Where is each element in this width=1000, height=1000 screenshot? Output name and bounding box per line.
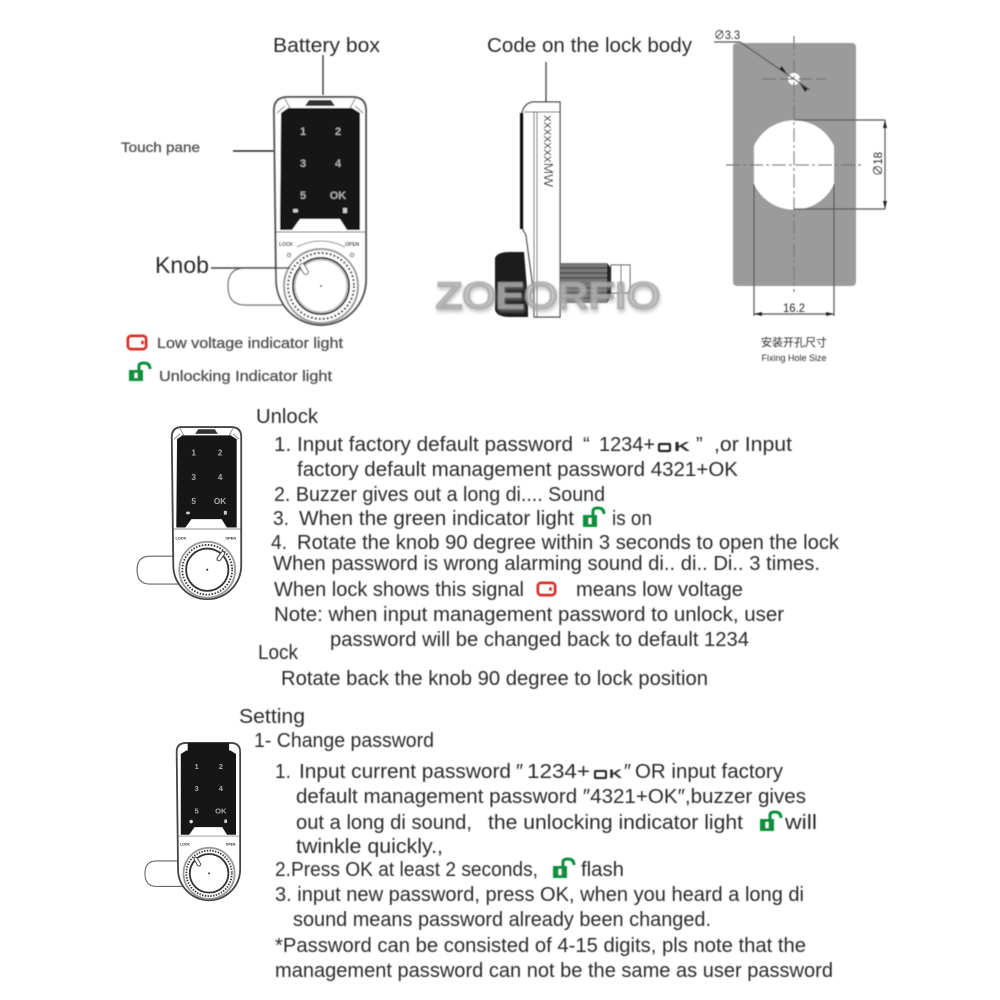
change password step 1: OR input factory: [635, 761, 783, 783]
panel: unlock illustration: [137, 427, 241, 599]
panel: unlock instructions: [256, 406, 840, 690]
panel: unlock illustration: 3: [191, 472, 196, 482]
change password step 1: [275, 761, 817, 858]
change password step 1: 1234+: [527, 761, 590, 783]
front lock illustration: LOCK: [279, 242, 294, 248]
change password step 1: default management password ″4321+OK″,buzzer gives: [296, 786, 806, 808]
change password step 2: 2.Press OK at least 2 seconds,: [275, 859, 538, 881]
steps 1 to 4: Rotate the knob 90 degree within 3 seconds to open the lock: [297, 532, 840, 554]
front lock illustration: 1: [300, 126, 306, 138]
steps 1 to 4: 1. Input factory default password: [274, 434, 573, 456]
steps 1 to 4: 2. Buzzer gives out a long di.... Sound: [274, 484, 605, 506]
notes: When lock shows this signal: [274, 579, 524, 601]
watermark: ZOEORFIO: [436, 275, 660, 316]
notes: password will be changed back to default 1234: [330, 629, 749, 651]
change password step 3: [275, 884, 804, 931]
panel: unlock illustration: OPEN: [225, 537, 236, 541]
center lines and dimensions: [714, 36, 885, 316]
label: battery box: [273, 35, 380, 95]
caption: [761, 335, 827, 363]
subheading: change password: 1- Change password: [254, 730, 434, 752]
caption: 安装开孔尺寸: [761, 335, 827, 349]
dimension labels: [714, 28, 885, 315]
steps 1 to 4: 3.: [273, 508, 289, 530]
gray mounting plate: [733, 43, 856, 286]
change password step 1: will: [784, 812, 817, 834]
steps 1 to 4: 4.: [271, 532, 287, 554]
steps 1 to 4: factory default management password 4321+OK: [297, 459, 739, 481]
legend: low voltage indicator: Low voltage indicator light: [157, 336, 343, 352]
steps 1 to 4: is on: [612, 508, 652, 530]
change password step 1: 1.: [275, 761, 291, 783]
steps 1 to 4: [271, 434, 840, 554]
side lock illustration: xxxxxxxMW: [541, 115, 556, 188]
password note: management password can not be the same as user password: [275, 960, 833, 982]
lock step: Rotate back the knob 90 degree to lock position: [281, 668, 708, 690]
legend: unlocking indicator: Unlocking Indicator light: [159, 369, 332, 385]
change password step 1: twinkle quickly.,: [296, 836, 443, 858]
panel: unlock illustration: 1: [191, 448, 196, 458]
change password step 1: ″: [516, 761, 523, 783]
large cut-out: [754, 120, 834, 210]
panel: unlock illustration: 4: [218, 472, 223, 482]
dimension labels: ∅18: [871, 152, 885, 176]
panel: setting illustration: 5: [195, 806, 199, 815]
panel: setting instructions: [239, 706, 833, 982]
label: knob: [155, 252, 290, 278]
steps 1 to 4: “: [583, 434, 590, 456]
panel: setting illustration: OK: [215, 806, 227, 815]
caption: Fixing Hole Size: [761, 353, 827, 363]
dimension labels: ∅3.3: [714, 28, 740, 42]
front lock illustration: 5: [300, 190, 306, 202]
panel: front view diagram: [121, 35, 380, 385]
panel: fixing hole size diagram: [714, 28, 887, 363]
change password step 1: ″: [624, 761, 631, 783]
heading: lock: Lock: [258, 642, 299, 664]
side lock illustration: [495, 102, 630, 317]
change password step 1: the unlocking indicator light: [488, 812, 743, 834]
password note: *Password can be consisted of 4-15 digits, pls note that the: [275, 935, 806, 957]
label: knob: Knob: [155, 252, 209, 278]
label: battery box: Battery box: [273, 35, 380, 57]
heading: unlock: Unlock: [256, 406, 319, 428]
panel: side view diagram: [436, 35, 692, 317]
notes: means low voltage: [576, 579, 743, 601]
label: code on the lock body: Code on the lock body: [487, 35, 692, 57]
small screw hole: [788, 73, 800, 85]
panel: setting illustration: LOCK: [180, 843, 190, 847]
panel: setting illustration: 3: [195, 784, 199, 793]
panel: unlock illustration: 2: [218, 448, 223, 458]
change password step 2: flash: [581, 859, 624, 881]
steps 1 to 4: ”: [696, 434, 703, 456]
change password step 1: Input current password: [299, 761, 511, 783]
heading: setting: Setting: [239, 706, 305, 728]
front lock illustration: 4: [335, 158, 342, 170]
dimension labels: 16.2: [783, 301, 805, 315]
panel: setting illustration: OPEN: [226, 843, 236, 847]
legend: unlocking indicator: [129, 363, 332, 385]
change password step 1: K: [609, 767, 622, 781]
panel: setting illustration: 2: [219, 762, 223, 771]
panel: unlock illustration: 5: [191, 496, 196, 506]
front lock illustration: 2: [335, 126, 341, 138]
front lock illustration: OK: [330, 190, 346, 202]
notes: When password is wrong alarming sound di.. di.. Di.. 3 times.: [273, 553, 820, 575]
password note: [275, 935, 833, 982]
panel: setting illustration: [145, 743, 240, 900]
change password step 3: sound means password already been changed.: [293, 909, 711, 931]
steps 1 to 4: 1234+: [599, 434, 655, 456]
panel: unlock illustration: OK: [214, 496, 226, 506]
change password step 1: out a long di sound,: [296, 812, 472, 834]
steps 1 to 4: ,or Input: [714, 434, 792, 456]
panel: setting illustration: 1: [195, 762, 199, 771]
steps 1 to 4: K: [674, 439, 691, 454]
change password step 3: 3. input new password, press OK, when you heard a long di: [275, 884, 804, 906]
panel: unlock illustration: LOCK: [176, 537, 186, 541]
front lock illustration: OPEN: [345, 242, 360, 248]
steps 1 to 4: When the green indicator light: [299, 508, 574, 530]
front lock illustration: 3: [300, 158, 306, 170]
notes: Note: when input management password to unlock, user: [274, 604, 784, 626]
front lock illustration: [228, 97, 366, 325]
label: touch pane: Touch pane: [121, 139, 200, 155]
panel: setting illustration: 4: [219, 784, 224, 793]
notes: [273, 553, 820, 651]
